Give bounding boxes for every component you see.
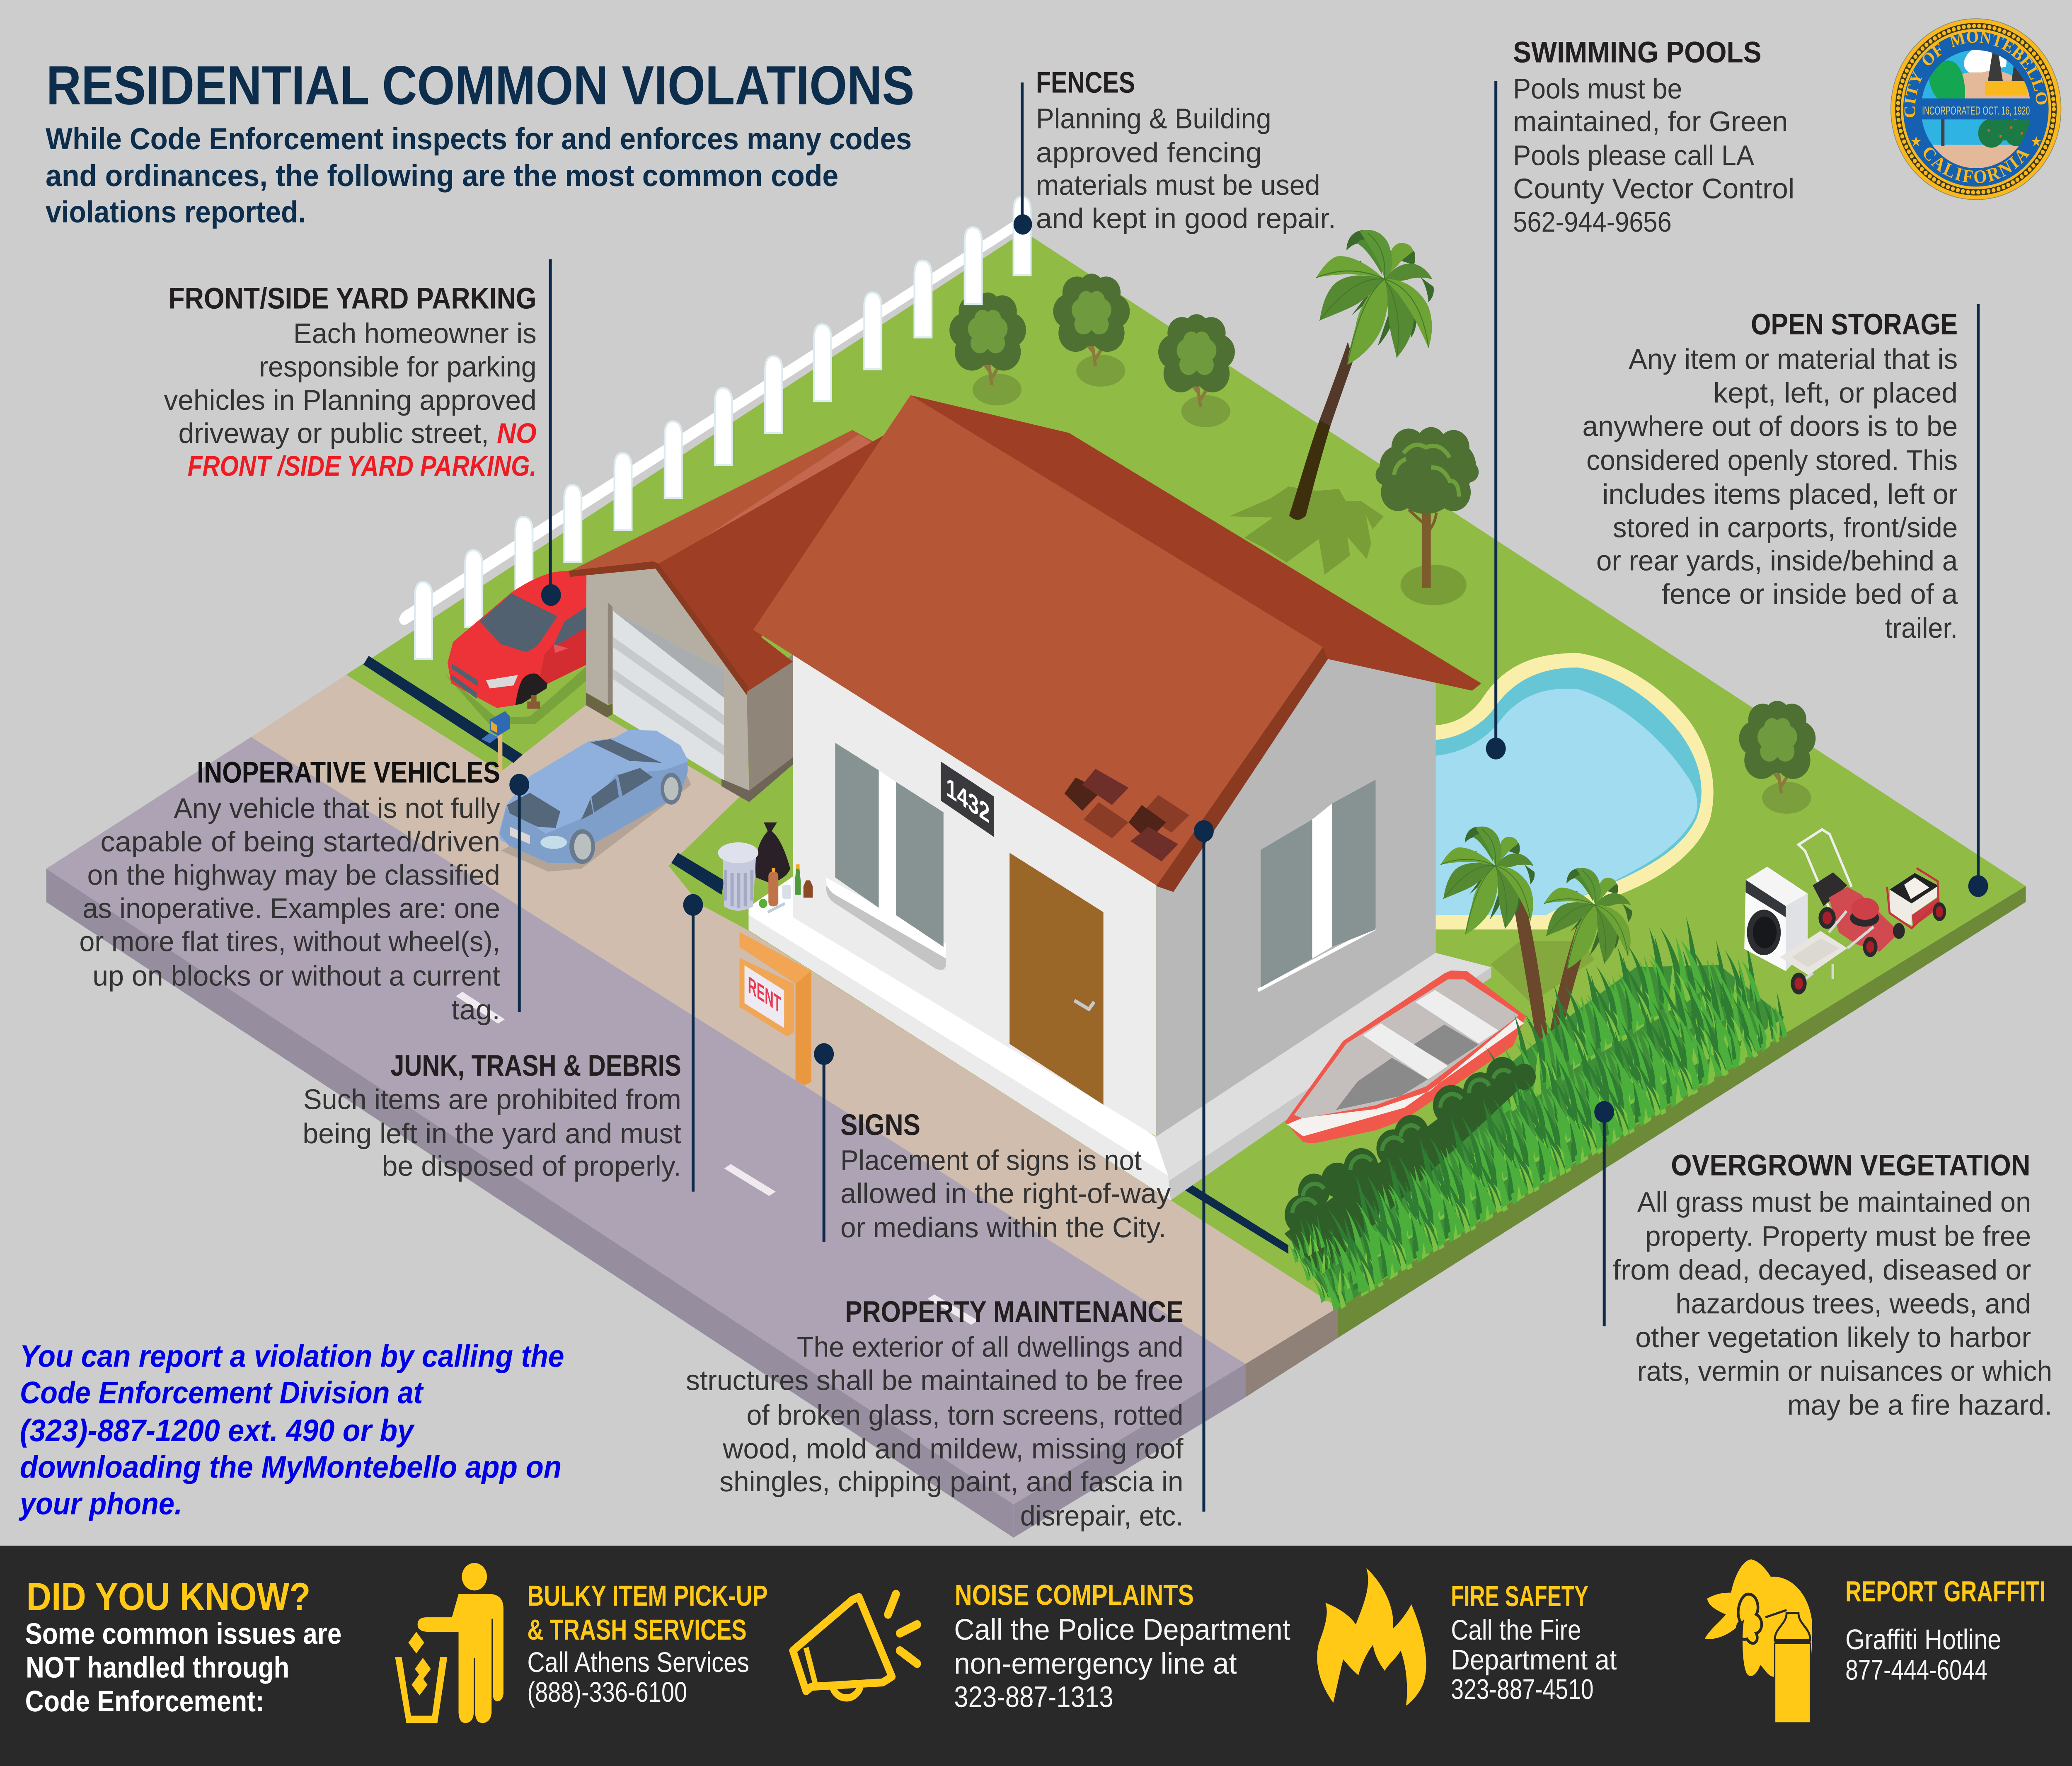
intro text: violations reported. [46,196,306,230]
lawn mower [1798,830,1905,957]
bulky item text: BULKY ITEM PICK-UP [527,1581,768,1613]
fences text [1036,67,1336,235]
fire safety text: Call the Fire [1451,1615,1581,1647]
report a violation note: You can report a violation by calling the [20,1339,564,1374]
bottles and scraps [759,864,813,912]
vegetation text: hazardous trees, weeds, and [1675,1289,2031,1321]
open storage text: OPEN STORAGE [1751,308,1958,342]
signs text: SIGNS [840,1109,920,1142]
noise complaints text: Call the Police Department [954,1614,1291,1647]
fences text: materials must be used [1036,170,1320,202]
callout: fences [1014,67,1336,235]
did you know: DID YOU KNOW? [27,1575,310,1619]
fence [399,197,1031,659]
hull [1285,970,1526,1143]
palm shadow on lawn [1491,941,1595,1003]
report a violation note: (323)-887-1200 ext. 490 or by [20,1413,415,1448]
open storage text: stored in carports, front/side [1613,513,1958,544]
property text: PROPERTY MAINTENANCE [845,1296,1184,1329]
junk text [303,1050,682,1183]
icon: red car on front yard [444,570,587,724]
open storage pointer [1968,304,1988,897]
property text: wood, mold and mildew, missing roof [721,1434,1184,1466]
report a violation note: your phone. [19,1487,182,1522]
garage roof [568,430,885,695]
callout: property maintenance [686,820,1214,1533]
property text: of broken glass, torn screens, rotted [747,1400,1184,1432]
road [46,737,1245,1505]
rent sign [739,932,811,1086]
vegetation text: property. Property must be free [1645,1221,2031,1253]
isometric lot base [46,232,2026,1538]
open storage text: kept, left, or placed [1713,378,1958,410]
junk and trash pile [718,823,813,912]
vegetation pointer [1594,1101,1614,1326]
garage side wall [747,654,793,791]
plate side: road, sidewalk and lawn thickness [46,869,2026,1538]
front wall [793,654,1156,1137]
main roof [753,395,1323,886]
seal arc text: bottom: CALIFORNIA [1918,141,2034,188]
trash can [718,842,758,911]
intro text [46,123,912,230]
callout: open storage [1583,304,1988,897]
footer band [0,1546,2072,1766]
intro text: and ordinances, the following are the most common code [46,160,838,193]
junk text: be disposed of properly. [382,1151,681,1183]
pools pointer [1486,81,1506,760]
small lawn beside front door [669,767,794,930]
inoperative text: capable of being started/driven [100,827,500,859]
bulky item text: Call Athens Services [527,1647,750,1679]
junk text: being left in the yard and must [303,1119,682,1151]
garage [586,565,793,802]
road dashes [456,992,978,1325]
fences text: and kept in good repair. [1036,203,1336,235]
report graffiti text: 877-444-6044 [1845,1655,1987,1687]
signs text: allowed in the right-of-way [840,1178,1171,1210]
city seal [1891,19,2061,200]
icon: graffiti spray can [1705,1559,1812,1723]
open storage text: fence or inside bed of a [1662,579,1958,611]
side window [1258,780,1376,990]
junk text: JUNK, TRASH & DEBRIS [390,1050,681,1083]
front palm trees [1440,827,1632,1055]
open storage text: Any item or material that is [1629,344,1958,376]
pools text: 562-944-9656 [1513,207,1672,239]
inoperative text: or more flat tires, without wheel(s), [79,927,500,958]
boat [1285,970,1526,1143]
washing machine [1744,867,1808,971]
boat floor [1336,1058,1428,1110]
inoperative text: Any vehicle that is not fully [174,793,501,825]
seal scene [1922,50,2031,168]
inoperative pointer [509,774,529,1012]
beaded ring [1898,26,2054,192]
parking pointer [541,259,561,606]
parking text: NO [497,419,537,450]
fire safety text: FIRE SAFETY [1451,1581,1589,1613]
did you know: NOT handled through [26,1652,289,1685]
parking text: FRONT /SIDE YARD PARKING. [188,451,537,483]
fences text: approved fencing [1036,138,1262,169]
vegetation text: may be a fire hazard. [1787,1390,2052,1422]
inoperative text: tag. [451,995,500,1026]
vegetation text: rats, vermin or nuisances or which [1637,1356,2052,1388]
front window [826,743,946,970]
fences text: Planning & Building [1036,104,1271,135]
fences pointer [1014,82,1032,235]
inoperative text: up on blocks or without a current [92,961,501,993]
inoperative text: as inoperative. Examples are: one [82,893,500,925]
front row of grass [1287,972,1788,1326]
large tree [1376,427,1479,605]
signs pointer [814,1043,834,1242]
open storage text: anywhere out of doors is to be [1583,411,1958,443]
vegetation text: from dead, decayed, diseased or [1613,1255,2032,1287]
sign post [796,971,811,1086]
open storage text: or rear yards, inside/behind a [1596,546,1958,578]
did you know [25,1575,341,1719]
vegetation text: OVERGROWN VEGETATION [1671,1149,2031,1183]
sign board [745,965,784,1028]
signs text: or medians within the City. [840,1213,1166,1245]
vegetation text: other vegetation likely to harbor [1635,1323,2032,1355]
pools text: maintained, for Green [1513,106,1788,138]
side wall [1156,651,1436,1137]
fences text: FENCES [1036,67,1135,100]
open storage text: trailer. [1885,613,1958,645]
callout: front/side yard parking [164,259,561,606]
sign beam [739,932,811,984]
junk text: Such items are prohibited from [303,1084,681,1116]
callout: swimming pools [1486,36,1794,760]
property text: structures shall be maintained to be free [686,1365,1184,1397]
noise complaints text: 323-887-1313 [954,1681,1113,1714]
noise complaints text: non-emergency line at [954,1647,1237,1681]
curb stripes [363,656,1288,1254]
inoperative text: INOPERATIVE VEHICLES [197,756,500,790]
report graffiti text [1845,1577,2045,1687]
icon: megaphone [793,1594,917,1698]
parking text: Each homeowner is [293,319,537,351]
sign frame [739,958,794,1037]
icon: flame [1317,1568,1426,1706]
report a violation note [19,1339,564,1522]
open storage items [1744,830,1946,994]
property text: shingles, chipping paint, and fascia in [719,1467,1184,1499]
inoperative text: on the highway may be classified [87,860,500,892]
pools text: County Vector Control [1513,174,1794,206]
sidewalk and driveway [251,675,1338,1364]
open storage text: considered openly stored. This [1586,445,1958,477]
icon: mailbox [482,711,510,772]
callout: inoperative vehicles [79,756,529,1026]
inoperative text [79,756,501,1026]
palm tree: back yard [1289,230,1434,520]
fire safety text: 323-887-4510 [1451,1674,1594,1706]
parking text [164,282,537,483]
noise complaints text: NOISE COMPLAINTS [955,1580,1194,1612]
boat interior [1294,980,1518,1118]
parking text: FRONT/SIDE YARD PARKING [169,282,537,316]
property text: disrepair, etc. [1020,1501,1184,1533]
pools text [1513,36,1794,239]
pools text: SWIMMING POOLS [1513,36,1762,70]
junk pointer [683,894,703,1192]
seal arc text: top: CITY OF MONTEBELLO [1900,27,2051,119]
seal stars [1911,136,2041,146]
garage wall [586,565,749,799]
report a violation note: downloading the MyMontebello app on [20,1450,562,1485]
vegetation text: All grass must be maintained on [1637,1187,2031,1219]
boat seats [1363,1023,1448,1079]
pools text: Pools please call LA [1513,140,1755,172]
title: RESIDENTIAL COMMON VIOLATIONS [46,56,915,117]
did you know: Some common issues are [25,1618,341,1651]
hedge [1284,1057,1536,1274]
trees behind house [949,273,1815,814]
report graffiti text: Graffiti Hotline [1845,1625,2002,1656]
swimming pool [1435,653,1714,929]
overgrown vegetation [1284,894,1788,1326]
vegetation text [1613,1149,2052,1422]
garage door [613,611,724,780]
palm tree shadow [1229,486,1384,575]
callout: signs [814,1043,1171,1245]
open storage text: includes items placed, left or [1602,479,1958,511]
door handle [1074,1001,1094,1009]
hedge highlights [1293,1070,1510,1213]
damaged roof shingles [1065,769,1189,861]
wheelbarrow [1780,911,1874,994]
bulky item text: (888)-336-6100 [527,1677,687,1709]
signs text [840,1109,1171,1245]
bulky item text [527,1581,768,1709]
parking text: vehicles in Planning approved [164,385,537,417]
intro text: While Code Enforcement inspects for and enforces many codes [46,123,912,156]
fire safety text [1451,1581,1617,1706]
generator [1887,868,1946,928]
house platform [748,876,1491,1200]
property text [686,1296,1184,1533]
icon: person disposing trash [395,1563,503,1723]
parking text: responsible for parking [259,352,537,384]
rent sign: RENT [748,973,781,1019]
property text: The exterior of all dwellings and [797,1332,1184,1364]
noise complaints text [954,1580,1291,1714]
fire safety text: Department at [1451,1645,1617,1676]
report a violation note: Code Enforcement Division at [20,1376,424,1410]
black trash bag [755,823,790,883]
roof eave band [1156,647,1328,892]
middle row of grass [1327,949,1755,1290]
house [748,395,1491,1200]
blue car [499,730,691,872]
signs text: Placement of signs is not [840,1145,1143,1177]
did you know: Code Enforcement: [25,1685,264,1719]
bulky item text: & TRASH SERVICES [527,1615,747,1647]
grass base [1293,965,1784,1307]
address plate: 1432 [946,772,990,830]
front door [1009,853,1104,1105]
pools text: Pools must be [1513,74,1682,106]
callout: overgrown vegetation [1594,1101,2052,1422]
parking text: driveway or public street, [178,419,489,450]
open storage text [1583,308,1958,645]
property pointer [1194,820,1214,1512]
curb stripe by the lawn [671,853,724,895]
lawn surface [346,232,2026,1307]
callout: junk, trash and debris [303,894,703,1192]
white band [1287,1018,1524,1136]
back row of grass [1485,894,1761,1129]
roof ridge band [910,395,1481,691]
garage door jamb [608,602,612,704]
